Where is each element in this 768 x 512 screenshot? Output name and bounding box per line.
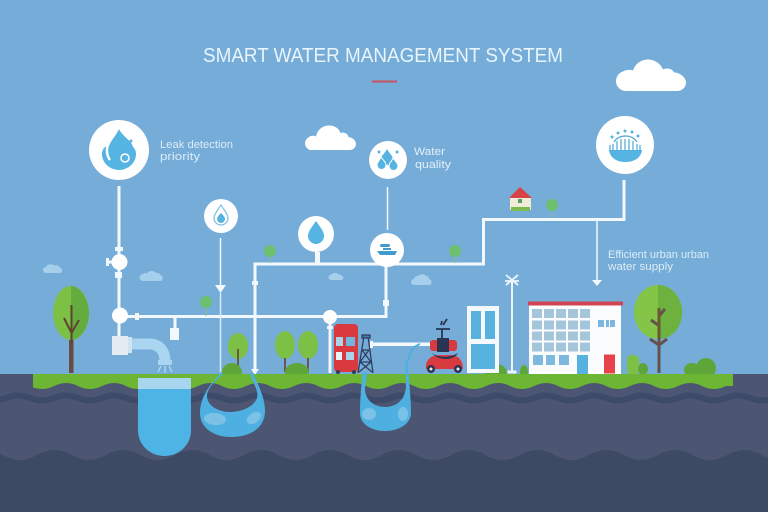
underground water tank (138, 378, 191, 456)
wind turbine (505, 275, 519, 373)
pipe junction nodes (112, 254, 337, 324)
lattice tower (358, 335, 373, 373)
robotic pump vehicle (426, 319, 463, 373)
soil dark stripe (0, 396, 768, 400)
red door (604, 354, 615, 374)
window grid (532, 309, 590, 352)
cloud: top right (616, 59, 686, 91)
label: leak detection: priority (160, 151, 201, 163)
label: water quality: quality (415, 159, 452, 171)
red double-decker bus (334, 324, 358, 374)
lower windows (533, 320, 615, 365)
icon: water drop circle (298, 216, 334, 252)
blue door (577, 355, 588, 374)
small clouds (43, 264, 432, 285)
icon: house (509, 187, 532, 211)
icon: flame-shaped drop circle (204, 199, 238, 233)
icon: pump node circle (370, 233, 404, 267)
bushes (222, 355, 716, 382)
soil base (0, 374, 768, 512)
title: SMART WATER MANAGEMENT SYSTEM (203, 45, 563, 67)
office building (528, 302, 623, 374)
title accent dash (372, 80, 397, 82)
icon: water quality circle (369, 141, 407, 179)
faucet (112, 336, 172, 373)
small lollipop trees (200, 199, 558, 316)
label: leak detection: Leak detection (160, 139, 233, 151)
small trees (228, 331, 318, 372)
underground basin right with feed pipe (360, 343, 420, 431)
cloud: middle (305, 126, 356, 150)
label: water quality: Water (414, 146, 445, 158)
pipe network (119, 180, 624, 373)
underground basin left (200, 373, 265, 437)
icon: leak detection circle (89, 120, 149, 180)
horizontal outlet pipe (370, 341, 430, 348)
ground layers (0, 374, 768, 512)
deep soil layer (0, 450, 768, 512)
label: efficient urban water supply: Efficient urban urban (608, 249, 709, 261)
grass strip (20, 374, 740, 389)
left tree (53, 286, 89, 373)
glass tower building (467, 306, 499, 373)
right tree (634, 285, 682, 373)
label: efficient urban water supply: water supply (607, 261, 674, 273)
icon: urban supply circle (596, 116, 654, 174)
pipe fittings and arrowheads (106, 247, 602, 375)
